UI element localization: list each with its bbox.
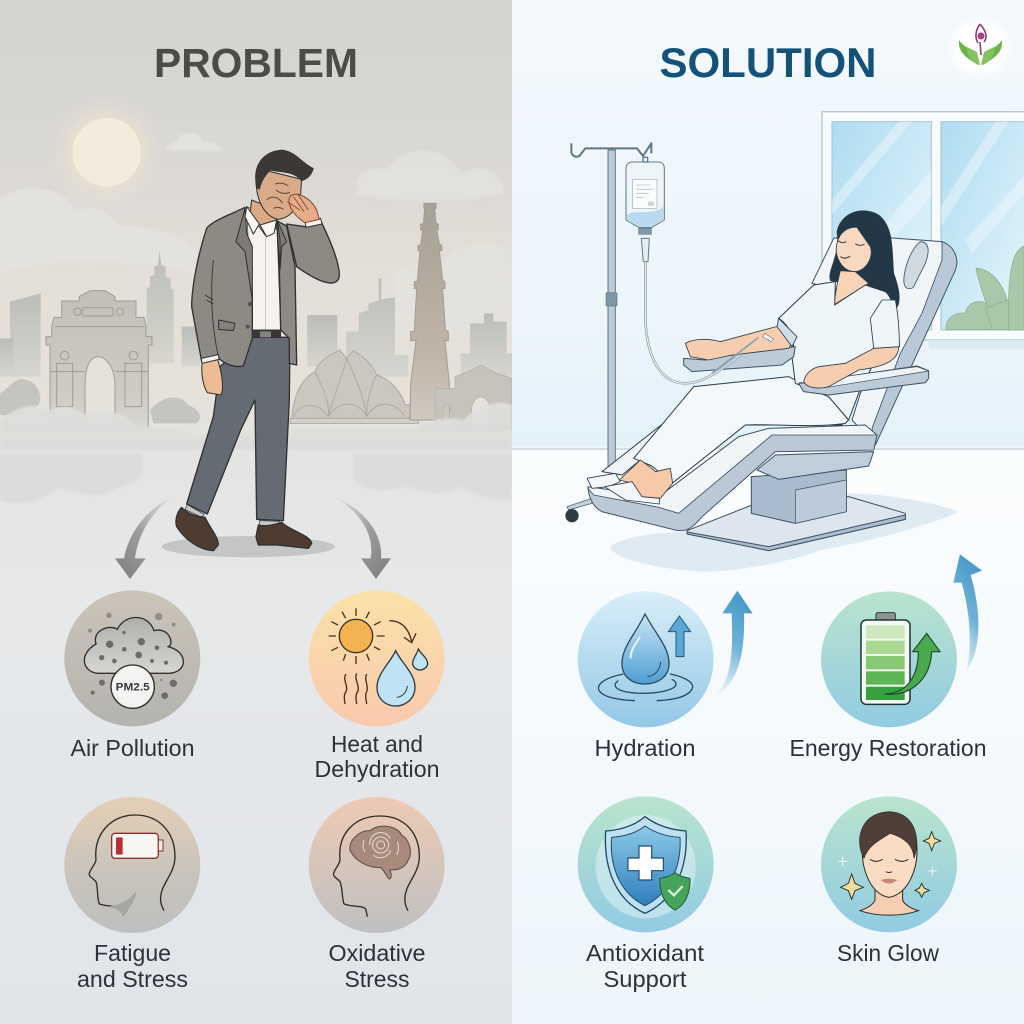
background buildings (0, 250, 512, 377)
illustration: clinic window (512, 112, 1024, 450)
icon: fatigue and stress (64, 797, 200, 933)
label: hydration: Hydration (594, 735, 696, 761)
trees (0, 379, 200, 423)
haze clouds (0, 133, 512, 333)
icon: antioxidant support (578, 796, 714, 932)
base plate (687, 497, 905, 551)
label: oxidative stress: Oxidative (328, 940, 426, 966)
hair (256, 150, 313, 189)
arrow: down left (115, 496, 174, 579)
panel: problem (0, 0, 512, 1024)
shoes (176, 507, 218, 551)
raised arm (287, 223, 339, 283)
treatment chair (588, 235, 957, 551)
raised hand (287, 194, 319, 223)
cuffs (201, 355, 219, 363)
label: energy restoration: Energy Restoration (790, 735, 986, 761)
floor clouds (0, 453, 512, 503)
label: heat and dehydration (314, 731, 440, 782)
base and caster (567, 498, 592, 510)
backrest (812, 235, 957, 445)
icon: skin glow (821, 796, 957, 932)
left hand (202, 358, 222, 395)
label: antioxidant support (586, 940, 705, 992)
label: fatigue and stress: and Stress (77, 966, 188, 992)
label: heat and dehydration: Heat and (331, 731, 423, 757)
face and neck (836, 227, 871, 272)
arrow: down right (333, 496, 391, 579)
jacket (192, 207, 252, 366)
arrow: up from hydration (714, 591, 753, 697)
socks (185, 505, 279, 526)
legs (602, 387, 845, 483)
neck and face (250, 200, 277, 235)
label: oxidative stress: Stress (344, 966, 410, 992)
landmark: India Gate (46, 291, 152, 428)
label: antioxidant support: Support (604, 966, 687, 992)
woman's arms (685, 300, 899, 388)
label: skin glow: Skin Glow (837, 940, 939, 966)
shirt (247, 207, 281, 330)
landmark: small gate (435, 365, 512, 430)
IV pole and bag (565, 143, 664, 522)
lapels (236, 208, 252, 300)
belt (252, 330, 281, 337)
armrests (684, 347, 929, 395)
landmark: Qutub Minar (410, 203, 450, 420)
far arm (685, 326, 792, 360)
smog bank (0, 403, 512, 449)
torso (779, 282, 899, 420)
icon: air pollution (64, 590, 200, 726)
icon: hydration (578, 591, 714, 727)
panel: solution (512, 0, 1024, 1024)
seat and leg rest (588, 425, 877, 531)
illustration: smoggy Delhi skyline (0, 94, 512, 503)
icon: heat and dehydration (309, 590, 445, 726)
collar (245, 207, 277, 237)
title: solution: SOLUTION (660, 39, 876, 86)
sun (48, 94, 165, 211)
icon: oxidative stress (309, 797, 445, 933)
floor shadow (610, 493, 958, 572)
label: fatigue and stress (77, 940, 188, 992)
label: antioxidant support: Antioxidant (586, 940, 705, 966)
icon: air pollution: PM2.5 (116, 682, 150, 694)
near arm (804, 347, 899, 388)
plant (946, 246, 1024, 330)
man rubbing his eyes (162, 150, 339, 557)
arrow: up from energy (953, 554, 982, 671)
IV bag (626, 157, 664, 262)
IV tube (645, 262, 764, 383)
pedestal (751, 470, 846, 523)
label: air pollution: Air Pollution (70, 735, 194, 761)
label: fatigue and stress: Fatigue (94, 940, 171, 966)
hair (830, 211, 899, 307)
logo (946, 13, 1014, 81)
label: oxidative stress (328, 940, 426, 992)
landmark: Lotus Temple (290, 350, 418, 423)
trousers (187, 337, 290, 521)
woman receiving drip (587, 211, 899, 504)
label: heat and dehydration: Dehydration (314, 756, 440, 782)
title: problem: PROBLEM (154, 40, 358, 86)
feet and slippers (619, 460, 673, 498)
icon: energy restoration (821, 591, 957, 727)
